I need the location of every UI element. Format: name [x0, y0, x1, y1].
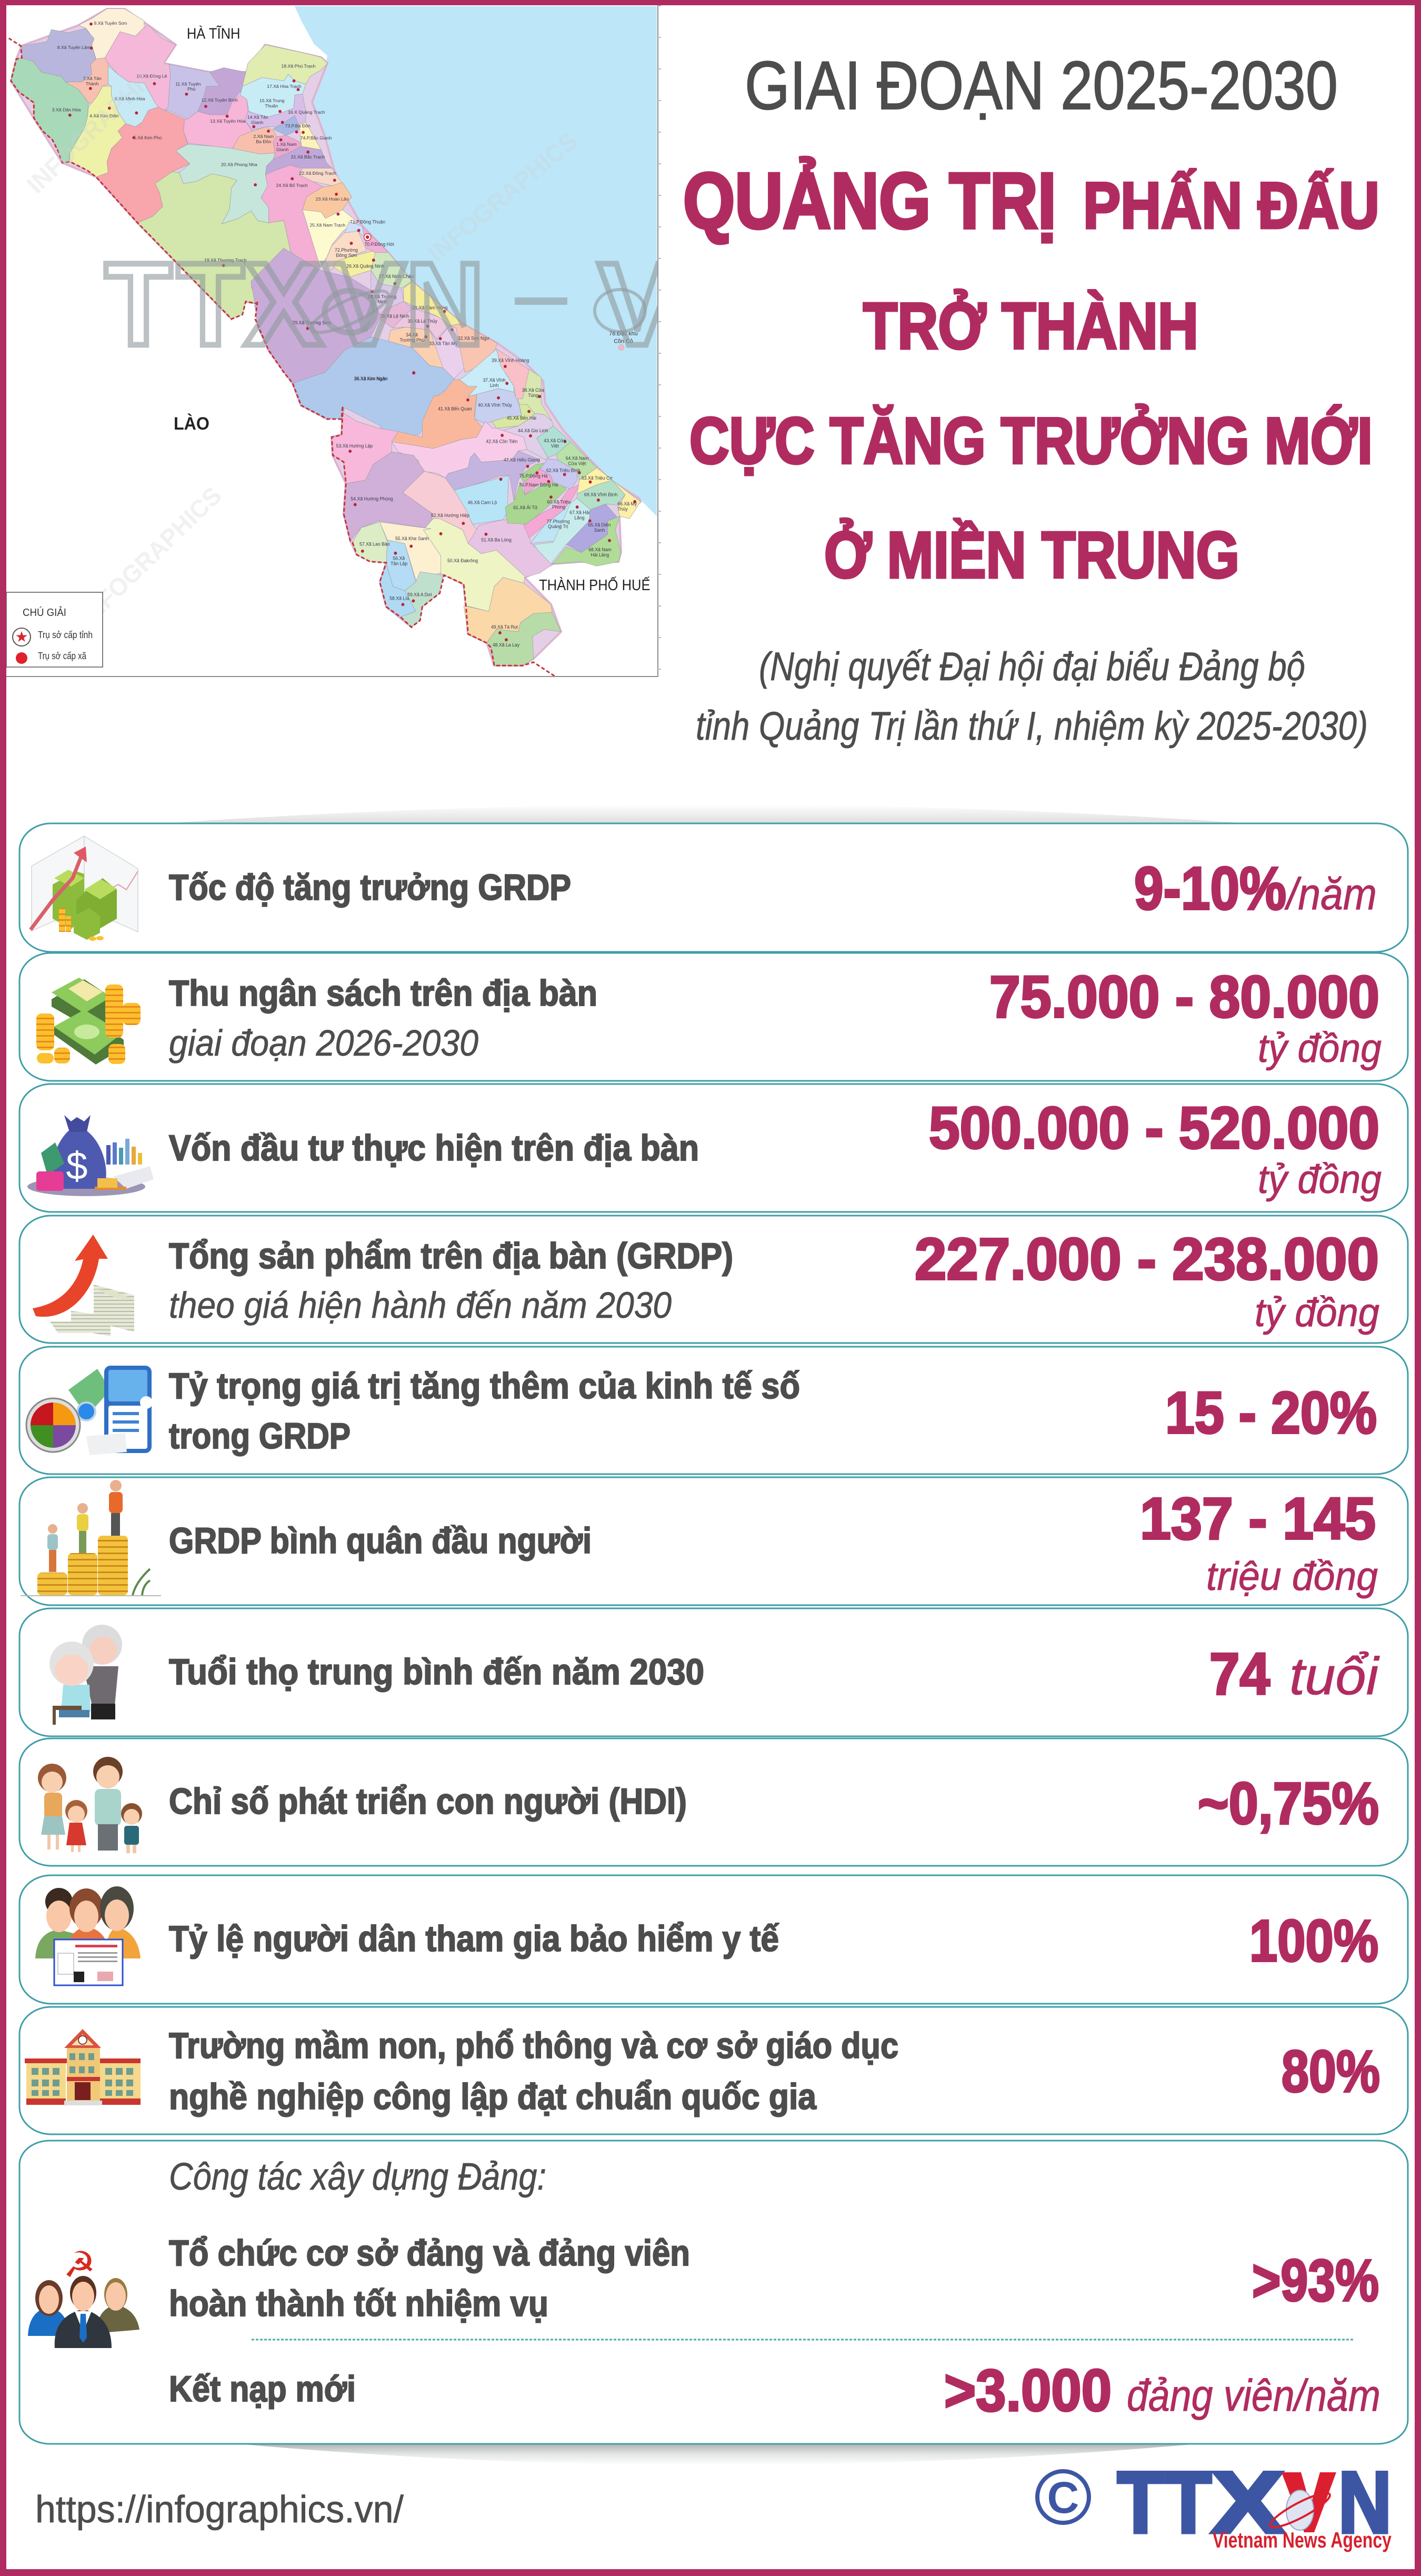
value: new members: >3.000: [944, 2358, 1112, 2423]
row 2: budget revenue: [19, 953, 1408, 1081]
value: 74: [1209, 1641, 1270, 1707]
label line 1: Tỷ trọng giá trị tăng thêm của kinh tế số: [169, 1366, 800, 1406]
legend: ★: [15, 628, 28, 645]
value: 100%: [1249, 1908, 1378, 1974]
commune names south: 43.Xã Cửa: [544, 438, 566, 443]
card: [19, 1084, 1408, 1212]
commune names north: 14.Xã Tân: [247, 114, 268, 120]
logo: TTXVN Vietnam News Agency: T: [1165, 2454, 1212, 2551]
commune names south: Lăng: [574, 515, 585, 520]
title line 4: Ở MIỀN TRUNG: [824, 519, 1239, 592]
commune names north: 15.Xã Trung: [259, 98, 285, 103]
row 10: national standard schools: [19, 2007, 1408, 2134]
commune names south: 46.Xã Cam Lộ: [468, 500, 497, 505]
label: Chỉ số phát triển con người (HDI): [169, 1781, 687, 1822]
commune names central: 34.Xã: [406, 332, 418, 337]
commune names central: 28.Xã Trường: [368, 294, 396, 300]
commune names north: 7.Xã Tân: [83, 76, 102, 81]
row 3: investment capital: [19, 1084, 1408, 1212]
commune names south: 38.Xã Cửa: [522, 387, 544, 393]
card: [19, 1347, 1408, 1474]
top heading: [683, 47, 1379, 749]
label: Laos: LÀO: [174, 414, 209, 434]
sub-heading: Công tác xây dựng Đảng:: [169, 2156, 546, 2198]
legend: CHÚ GIẢI: [23, 606, 66, 619]
commune names north: 4.Xã Kim Điền: [89, 113, 119, 118]
label line 2: nghề nghiệp công lập đạt chuẩn quốc gia: [169, 2076, 817, 2117]
label: Tỷ lệ người dân tham gia bảo hiểm y tế: [169, 1918, 779, 1959]
value: 500.000 - 520.000: [929, 1095, 1379, 1161]
subtitle line 1: (Nghị quyết Đại hội đại biểu Đảng bộ: [759, 644, 1305, 689]
commune names south: 64.Xã Nam: [566, 455, 588, 461]
card: [19, 2007, 1408, 2134]
title line 2: TRỞ THÀNH: [863, 290, 1198, 363]
commune names central: 31.Xã Cam Hồng: [413, 305, 447, 311]
copyright mark: C: [1047, 2473, 1079, 2522]
commune names north: 24.Xã Bố Trạch: [276, 183, 308, 188]
commune names south: 68.Xã Nam: [588, 547, 612, 552]
commune names central: 71.P.Đồng Thuận: [350, 219, 385, 224]
commune names south: 66.Xã Mỹ: [617, 501, 637, 506]
top shadow: [149, 804, 1263, 824]
value: 15 - 20%: [1165, 1380, 1377, 1446]
commune names south: Sanh: [594, 528, 605, 533]
logo: TTXVN Vietnam News Agency: [1117, 2454, 1392, 2552]
commune names north: 9.Xã Tuyên Sơn: [94, 21, 127, 26]
commune offices: [68, 23, 339, 267]
commune names north: Gianh: [276, 147, 288, 152]
northern communes: [11, 9, 356, 319]
map frame: [6, 5, 659, 677]
icon: family of four: [38, 1757, 142, 1853]
commune names north: 12.Xã Tuyên Bình: [202, 97, 238, 103]
commune names south: Hải Lăng: [591, 552, 609, 558]
card: [19, 1608, 1408, 1736]
commune names south: 52.Xã Hướng Hiệp: [431, 513, 469, 518]
label: new members: Kết nạp mới: [169, 2369, 356, 2409]
label: Tổng sản phẩm trên địa bàn (GRDP): [169, 1236, 733, 1276]
commune names south: 40.Xã Vĩnh Thủy: [478, 402, 512, 408]
commune names north: Gianh: [251, 120, 264, 125]
commune names north: 13.Xã Tuyên Hóa: [210, 118, 246, 124]
legend: Trụ sở cấp tỉnh: [38, 630, 93, 640]
commune names north: 8.Xã Tuyến Lâm: [57, 45, 91, 50]
unit: new members: đảng viên/năm: [1127, 2371, 1380, 2420]
commune names south: 44.Xã Gio Linh: [518, 428, 548, 433]
label: GRDP bình quân đầu người: [169, 1520, 592, 1561]
commune names south: Cửa Việt: [568, 461, 586, 466]
commune names south: 55.Xã Khe Sanh: [395, 536, 428, 541]
note: giai đoạn 2026-2030: [169, 1022, 478, 1063]
label: Thu ngân sách trên địa bàn: [169, 973, 597, 1013]
legend: [6, 592, 103, 667]
commune names central: 36.Xã Kim Ngân: [354, 376, 387, 381]
commune names north: 25.Xã Nam Trạch: [309, 222, 345, 227]
icon: red arrow over money: [33, 1235, 136, 1336]
commune names south: 69.Xã Vĩnh Định: [584, 492, 617, 498]
commune names central: [293, 219, 489, 381]
commune offices central: [306, 229, 454, 374]
commune names central: Ninh: [377, 299, 387, 304]
commune names central: 70.P.Đồng Hới: [364, 242, 394, 247]
logo: TTXVN Vietnam News Agency: N: [1338, 2454, 1392, 2551]
commune names central: 26.Xã Quảng Ninh: [346, 263, 384, 268]
label: Tuổi thọ trung bình đến năm 2030: [169, 1652, 704, 1692]
unit: tuổi: [1289, 1647, 1380, 1706]
commune names north: 19.Xã Thượng Trạch: [204, 257, 247, 263]
commune names north: 74.P.Bắc Gianh: [301, 135, 332, 141]
row 4: gross product: [19, 1216, 1408, 1343]
commune names central: 29.Xã Trường Sơn: [293, 320, 331, 325]
commune names north: 3.Xã Dân Hóa: [52, 107, 81, 113]
unit: tỷ đồng: [1255, 1290, 1379, 1335]
commune names central: 35.Xã Lệ Ninh: [380, 314, 409, 319]
commune names south: 60.Xã Triệu: [547, 500, 571, 505]
commune names central: 30.Xã Lệ Thủy: [407, 319, 438, 324]
commune names central: Trường Phú: [400, 337, 425, 343]
icon: banknotes and coins: [36, 978, 141, 1065]
map of Quang Tri province: [6, 6, 676, 678]
TTXVN watermark: X: [244, 238, 323, 370]
commune names central: 72.Phường: [335, 247, 358, 253]
card: [19, 823, 1408, 952]
icon: school building: [25, 2029, 141, 2105]
logo: TTXVN Vietnam News Agency: T: [1117, 2454, 1164, 2551]
commune offices south: [348, 365, 636, 641]
commune names south: 65.Xã Diên: [588, 522, 611, 528]
copyright mark: [1037, 2471, 1089, 2523]
value: 9-10%: [1134, 855, 1286, 922]
icon: people with insurance card: [35, 1886, 141, 1985]
commune names south: 50.Xã Đakrông: [447, 558, 478, 563]
TTXVN watermark: N: [406, 238, 484, 370]
unit: tỷ đồng: [1258, 1157, 1382, 1202]
commune names south: 47.Xã Hiếu Giang: [504, 457, 540, 462]
commune names south: 76.P.Nam Đông Hà: [519, 482, 558, 488]
commune names north: 73.P.Ba Đồn: [285, 123, 311, 128]
commune names south: Tùng: [528, 393, 538, 398]
TTXVN watermark: [105, 238, 676, 370]
row 6: GRDP per capita: [19, 1477, 1408, 1605]
row 8: human development index: [19, 1738, 1408, 1866]
southern communes: [332, 331, 651, 665]
land silhouette: [11, 9, 641, 665]
label: Con Co island: 78.Đặc khu: [609, 331, 638, 337]
commune names south: 62.Xã Triệu Bình: [546, 468, 581, 473]
card: [19, 2141, 1408, 2444]
card: [19, 1875, 1408, 2004]
row 7: life expectancy: [19, 1608, 1408, 1736]
TTXVN watermark: T: [177, 238, 244, 370]
faint INFOGRAPHICS watermarks: INFOGRAPHICS: [74, 482, 227, 630]
note: theo giá hiện hành đến năm 2030: [169, 1285, 672, 1326]
commune names north: 22.Xã Đông Trạch: [299, 171, 336, 176]
title line 1 large: QUẢNG TRỊ: [683, 156, 1056, 245]
bottom shadow: [226, 2443, 1210, 2465]
border with Laos: [9, 38, 557, 678]
commune names south: Phong: [552, 504, 565, 510]
commune names south: 77.Phường: [547, 519, 570, 524]
commune names south: 41.Xã Bến Quan: [438, 406, 472, 411]
unit: /năm: [1284, 869, 1377, 919]
value: 227.000 - 238.000: [915, 1226, 1379, 1292]
commune names south: 36.Xã Kim Ngân: [354, 376, 387, 381]
commune names south: 54.Xã Hướng Phùng: [351, 496, 393, 502]
commune names south: Quảng Trị: [548, 524, 568, 529]
commune names north: 16.X Quảng Trạch: [288, 110, 325, 115]
commune names south: 48.Xã La Lay: [493, 642, 520, 648]
value: ~0,75%: [1198, 1771, 1379, 1836]
commune names south: 56.Xã: [393, 556, 405, 561]
label line 2: hoàn thành tốt nhiệm vụ: [169, 2283, 548, 2324]
legend: Trụ sở cấp xã: [38, 651, 87, 661]
commune names south: 63.Xã Triệu Cơ: [582, 475, 613, 481]
commune names south: Thủy: [617, 506, 628, 512]
commune names north: 2.Xã Nam: [253, 134, 274, 139]
commune names south: 61.Xã Ái Tử: [513, 505, 538, 510]
value: 75.000 - 80.000: [989, 964, 1379, 1030]
commune names north: [52, 21, 349, 263]
commune names south: 75.P.Đông Hà: [519, 473, 547, 479]
TTXVN watermark: T: [105, 238, 172, 370]
commune names north: Phú: [187, 86, 196, 92]
commune names south: 39.Xã Vĩnh Hoàng: [492, 357, 529, 363]
icon: party members with hammer and sickle: ☭: [64, 2244, 95, 2286]
commune names south: 67.Xã Hải: [569, 510, 589, 515]
label: Vốn đầu tư thực hiện trên địa bàn: [169, 1128, 699, 1168]
commune names north: Ba Đồn: [256, 139, 272, 144]
commune names south: 45.Xã Bến Hải: [507, 415, 536, 421]
commune names north: 6.Xã Minh Hóa: [115, 96, 145, 101]
commune names central: 27.Xã Ninh Châu: [379, 274, 414, 279]
commune names north: 23.Xã Hoàn Lão: [316, 196, 349, 202]
label line 2: trong GRDP: [169, 1416, 351, 1456]
sea: [295, 6, 657, 516]
commune names central: Đông Sơn: [336, 253, 357, 258]
label: Hue city: THÀNH PHỐ HUẾ: [539, 576, 651, 593]
TTXVN watermark: V: [323, 238, 406, 370]
commune names north: Thành: [86, 81, 99, 86]
commune names south: 57.Xã Lao Bảo: [359, 541, 390, 547]
commune names north: Thuận: [265, 103, 278, 108]
commune names south: 37.Xã Vĩnh: [483, 377, 506, 383]
commune names south: 58.Xã Lìa: [389, 596, 409, 601]
provincial office star: [364, 234, 371, 241]
icon: party members with hammer and sickle: [28, 2244, 139, 2348]
icon: money bag: [27, 1115, 154, 1196]
card: [19, 1738, 1408, 1866]
row 11: party building: [19, 2141, 1408, 2444]
icon: money stacks with growth chart: [31, 836, 138, 941]
label: Ha Tinh: HÀ TĨNH: [187, 25, 240, 42]
value: 80%: [1282, 2038, 1380, 2104]
value: party cells: >93%: [1252, 2247, 1379, 2313]
commune names north: 17.Xã Hòa Trạch: [267, 84, 302, 89]
central communes: [251, 219, 497, 441]
commune names south: Linh: [490, 383, 498, 388]
row 1: GRDP growth: [19, 823, 1408, 952]
label: Con Co island: [609, 331, 638, 351]
commune names north: 20.Xã Phong Nha: [221, 162, 257, 167]
commune names south: 53.Xã Hướng Lập: [336, 443, 373, 449]
faint INFOGRAPHICS watermarks: INFOGRAPHICS: [423, 127, 583, 267]
label line 1: Trường mầm non, phổ thông và cơ sở giáo dục: [169, 2025, 898, 2066]
TTXVN watermark: V: [598, 238, 676, 370]
value: 137 - 145: [1140, 1486, 1376, 1551]
row 9: health insurance: [19, 1875, 1408, 2004]
commune names south: Tân Lập: [391, 561, 407, 566]
row 5: digital economy share: [19, 1347, 1408, 1474]
commune names south: 59.Xã A Dơi: [407, 592, 432, 597]
commune names north: 11.Xã Tuyến: [175, 82, 201, 87]
card: [19, 953, 1408, 1081]
commune names south: 49.Xã Tà Rụt: [491, 624, 518, 630]
commune names central: 33.Xã Tân Mỹ: [429, 341, 458, 346]
icon: money bag: $: [66, 1144, 88, 1188]
title line 1 small: PHẤN ĐẤU: [1083, 169, 1379, 242]
commune names south: Việt: [551, 443, 559, 449]
icon: elderly couple: [49, 1625, 122, 1725]
commune names north: 5.Xã Kim Phú: [134, 135, 162, 140]
unit: triệu đồng: [1206, 1554, 1378, 1599]
card: [19, 1216, 1408, 1343]
commune names north: 18.Xã Phú Trạch: [282, 64, 316, 69]
icon: people on coin stacks: [21, 1480, 161, 1596]
commune names south: 42.Xã Cồn Tiên: [486, 439, 517, 444]
faint INFOGRAPHICS watermarks: [22, 50, 583, 630]
commune names central: 32.Xã Sen Ngư: [458, 336, 489, 341]
logo: TTXVN Vietnam News Agency: X: [1212, 2454, 1284, 2551]
label line 1: Tổ chức cơ sở đảng và đảng viên: [169, 2233, 690, 2273]
faint INFOGRAPHICS watermarks: INFOGRAPHICS: [22, 50, 174, 198]
commune names south: 51.Xã Ba Lòng: [481, 537, 512, 542]
card: [19, 1477, 1408, 1605]
label: Tốc độ tăng trưởng GRDP: [169, 867, 571, 908]
unit: tỷ đồng: [1258, 1026, 1382, 1071]
website address: https://infographics.vn/: [35, 2489, 404, 2531]
commune names north: 21.Xã Bắc Trạch: [291, 154, 325, 160]
commune names north: 10.Xã Đồng Lê: [136, 73, 167, 78]
icon: pie chart and smartphone: [26, 1366, 153, 1455]
label: Con Co island: Cồn Cỏ: [614, 338, 633, 344]
commune names north: 1.Xã Nam: [276, 142, 297, 147]
commune names south: [336, 357, 637, 648]
